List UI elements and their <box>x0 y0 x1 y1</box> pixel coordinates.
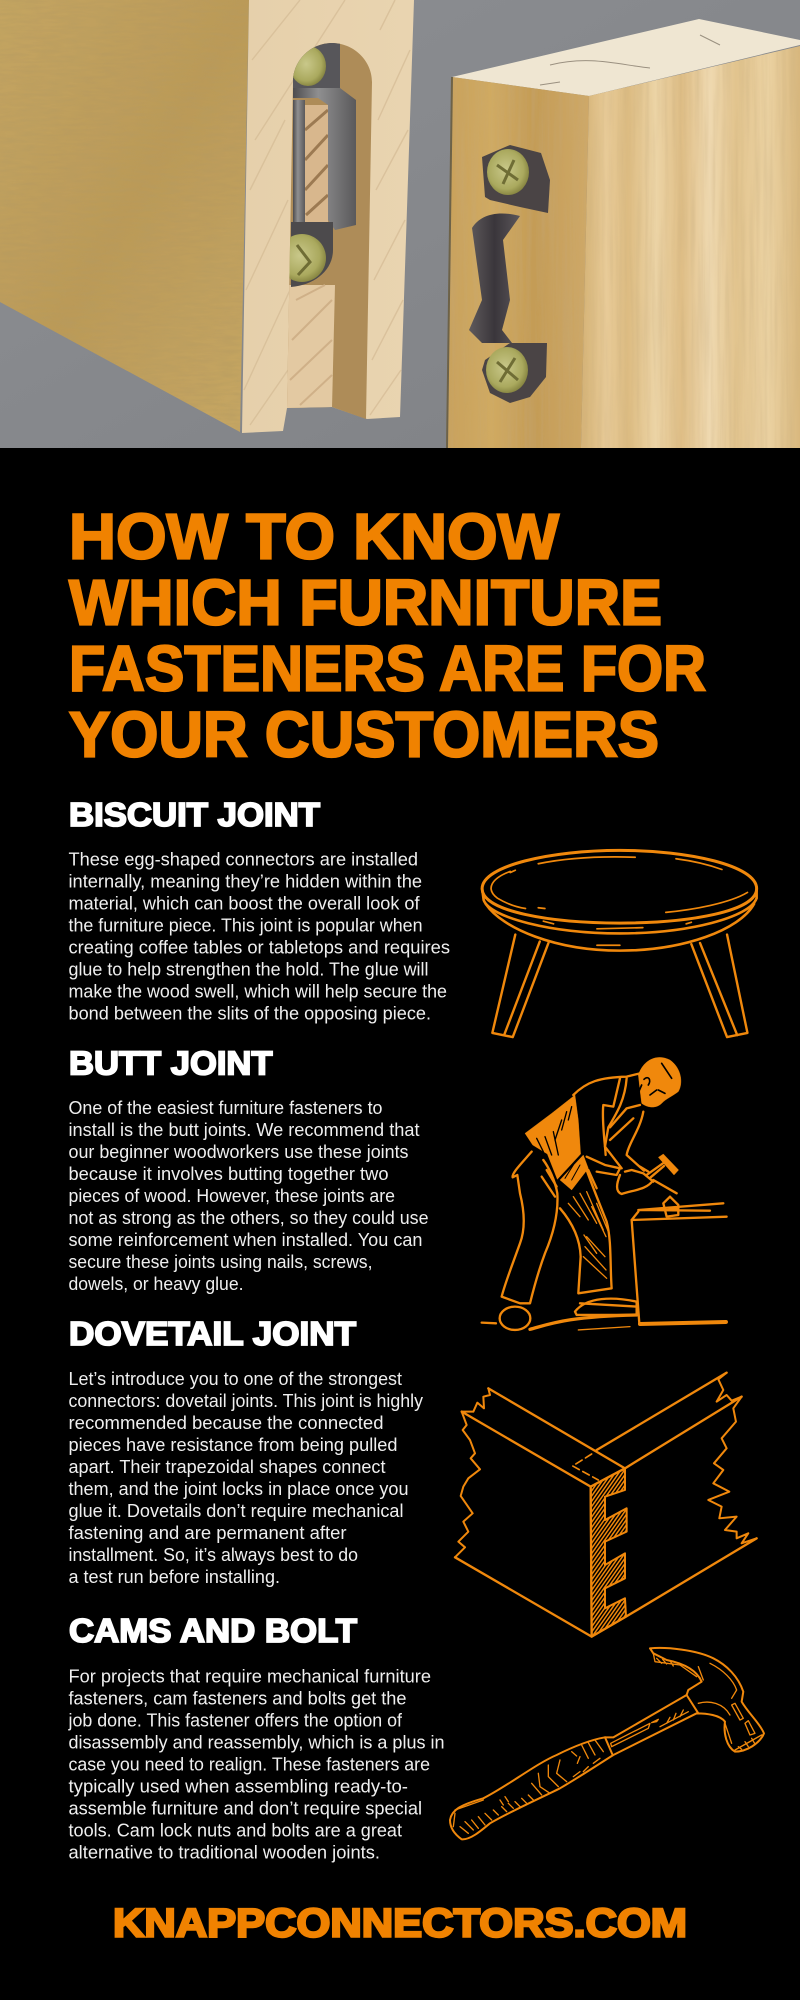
icon: round table <box>482 850 757 1037</box>
text block: cams and bolt: typically used when assembling ready-to- <box>68 1776 408 1796</box>
text block: biscuit joint: the furniture piece. This joint is popular when <box>68 916 422 936</box>
text block: cams and bolt: alternative to traditional wooden joints. <box>68 1842 380 1862</box>
section heading: cams and bolt: CAMS AND BOLT <box>69 1612 357 1649</box>
head <box>638 1057 681 1107</box>
section heading: biscuit joint: BISCUIT JOINT <box>69 796 320 833</box>
text block: biscuit joint: material, which can boost the overall look of <box>68 894 420 914</box>
text block: dovetail joint: Let’s introduce you to one of the strongest <box>68 1369 402 1389</box>
icon: claw hammer <box>450 1648 764 1839</box>
text block: biscuit joint: glue to help strengthen the hold. The glue will <box>68 960 428 980</box>
left board end grain with slot <box>242 0 414 433</box>
text block: biscuit joint: internally, meaning they’re hidden within the <box>68 872 422 892</box>
title: HOW TO KNOW <box>69 500 560 572</box>
text block: butt joint <box>68 1098 428 1294</box>
text block: biscuit joint <box>68 850 450 1024</box>
leg hatching <box>568 1192 608 1278</box>
text block: butt joint: our beginner woodworkers use these joints <box>68 1142 408 1162</box>
title: WHICH FURNITURE <box>69 566 662 638</box>
work bench <box>632 1197 727 1324</box>
text block: biscuit joint: These egg-shaped connectors are installed <box>68 850 418 870</box>
text block: dovetail joint: recommended because the connected <box>68 1413 384 1433</box>
metal bracket on right block <box>469 145 550 403</box>
icon: woodworker hammering <box>482 1057 727 1330</box>
text block: dovetail joint <box>68 1369 423 1587</box>
right block side face <box>581 46 800 448</box>
text block: biscuit joint: bond between the slits of the opposing piece. <box>68 1004 431 1024</box>
text block: butt joint: One of the easiest furniture fasteners to <box>68 1098 382 1118</box>
text block: dovetail joint: installment. So, it’s always best to do <box>68 1545 358 1565</box>
text block: dovetail joint: apart. Their trapezoidal shapes connect <box>68 1457 386 1477</box>
text block: biscuit joint: creating coffee tables or tabletops and requires <box>68 938 450 958</box>
text block: butt joint: because it involves butting together two <box>68 1164 388 1184</box>
text block: biscuit joint: make the wood swell, which will help secure the <box>68 982 447 1002</box>
text block: cams and bolt: assemble furniture and don’t require special <box>68 1798 422 1818</box>
title <box>69 500 706 770</box>
text block: cams and bolt <box>68 1666 444 1862</box>
text block: butt joint: pieces of wood. However, these joints are <box>68 1186 395 1206</box>
text block: dovetail joint: connectors: dovetail joints. This joint is highly <box>68 1391 423 1411</box>
text block: cams and bolt: job done. This fastener offers the option of <box>68 1710 403 1730</box>
icon: dovetail joint <box>455 1373 757 1637</box>
text block: cams and bolt: disassembly and reassembly, which is a plus in <box>68 1732 444 1752</box>
title: YOUR CUSTOMERS <box>69 698 659 770</box>
text block: dovetail joint: pieces have resistance from being pulled <box>68 1435 398 1455</box>
text block: butt joint: dowels, or heavy glue. <box>68 1274 244 1294</box>
text block: butt joint: some reinforcement when installed. You can <box>68 1230 422 1250</box>
text block: dovetail joint: a test run before installing. <box>68 1567 280 1587</box>
right block top face <box>452 19 800 96</box>
text block: dovetail joint: them, and the joint locks in place once you <box>68 1479 408 1499</box>
footer website: KNAPPCONNECTORS.COM <box>113 1902 687 1946</box>
photo: furniture fastener in two wooden boards <box>0 0 800 448</box>
shoes and ground <box>482 1299 637 1330</box>
hammer head <box>658 1154 679 1175</box>
trousers <box>502 1152 612 1303</box>
text block: cams and bolt: tools. Cam lock nuts and bolts are a great <box>68 1820 402 1840</box>
text block: dovetail joint: fastening and are permanent after <box>68 1523 346 1543</box>
text block: cams and bolt: For projects that require mechanical furniture <box>68 1666 431 1686</box>
title: FASTENERS ARE FOR <box>69 632 706 704</box>
text block: butt joint: secure these joints using nails, screws, <box>68 1252 372 1272</box>
back of vest and apron <box>525 1095 581 1179</box>
text block: cams and bolt: case you need to realign. These fasteners are <box>68 1754 430 1774</box>
text block: butt joint: not as strong as the others, so they could use <box>68 1208 428 1228</box>
section heading: dovetail joint: DOVETAIL JOINT <box>69 1315 356 1352</box>
text block: cams and bolt: fasteners, cam fasteners and bolts get the <box>68 1688 406 1708</box>
text block: dovetail joint: glue it. Dovetails don’t require mechanical <box>68 1501 404 1521</box>
section heading: butt joint: BUTT JOINT <box>69 1044 272 1081</box>
right block front face <box>447 77 589 448</box>
left board face <box>0 0 249 432</box>
text block: butt joint: install is the butt joints. We recommend that <box>68 1120 419 1140</box>
